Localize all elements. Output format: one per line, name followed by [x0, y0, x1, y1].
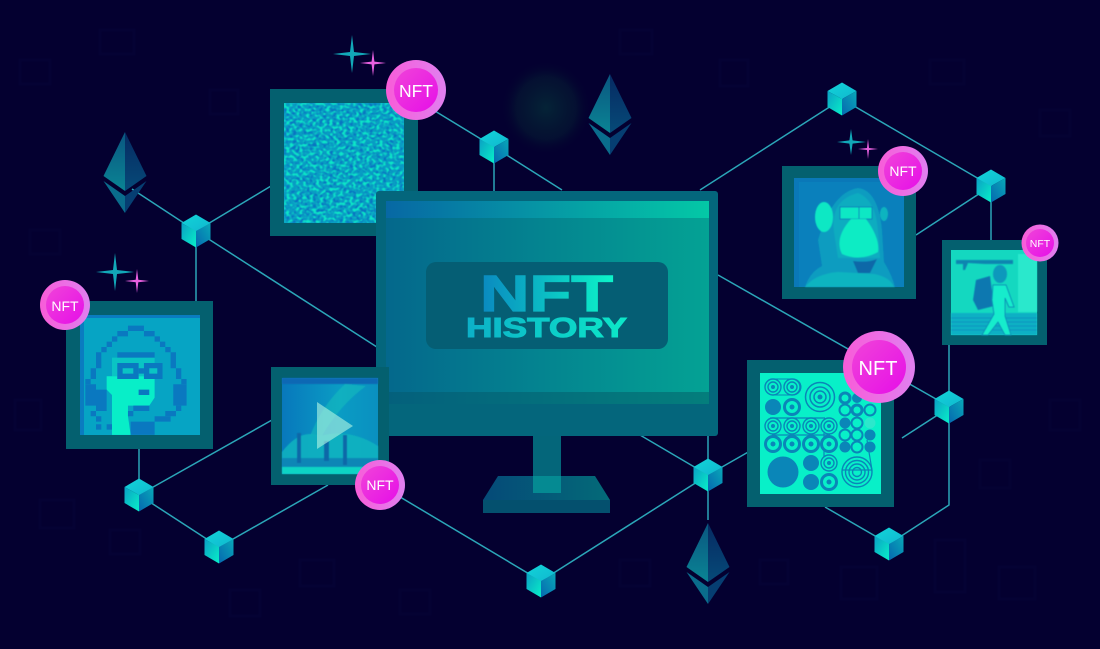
icon: ethereum top	[588, 74, 632, 155]
badge: NFT video: NFT	[366, 477, 394, 493]
green glow behind ethereum icon	[500, 60, 592, 156]
title plate	[426, 262, 668, 349]
icon: ethereum bottom	[686, 523, 730, 604]
badge: NFT ape: NFT	[889, 163, 917, 179]
monitor stand	[483, 436, 610, 513]
badge: NFT circles	[843, 331, 915, 403]
network connector lines	[132, 99, 991, 581]
icon: sparkles right	[837, 129, 878, 159]
panel: astronaut artwork frame	[942, 240, 1047, 345]
pixel portrait	[85, 328, 187, 435]
panel: pixel portrait frame	[66, 301, 213, 449]
badge: NFT astronaut	[1022, 224, 1058, 262]
panel: video artwork frame	[271, 367, 389, 485]
badge: NFT left	[40, 280, 90, 330]
badge: NFT top	[386, 60, 446, 120]
video scene	[282, 378, 378, 474]
astronaut walking scene	[951, 254, 1037, 335]
icon: sparkles top	[333, 35, 386, 76]
ape portrait	[805, 188, 895, 287]
badge: NFT video	[355, 460, 405, 510]
panel: monitor	[376, 191, 718, 513]
panel: ape artwork frame	[782, 166, 916, 299]
circle pattern	[765, 379, 876, 490]
panel: circles artwork frame	[747, 360, 894, 507]
monitor screen	[386, 201, 709, 404]
title: NFT: NFT	[480, 265, 613, 322]
icon: sparkles left	[96, 253, 149, 293]
icon: ethereum left	[104, 132, 146, 213]
monitor body	[376, 191, 718, 436]
title: HISTORY: HISTORY	[466, 312, 627, 343]
badge: NFT ape	[878, 146, 928, 196]
icon: play button	[317, 402, 353, 449]
badge: NFT circles: NFT	[859, 358, 897, 380]
panel: noise artwork frame	[270, 89, 418, 236]
badge: NFT astronaut: NFT	[1030, 238, 1051, 250]
icons: blockchain cubes	[124, 82, 1006, 598]
badge: NFT top: NFT	[399, 81, 433, 101]
badge: NFT left: NFT	[51, 298, 79, 314]
